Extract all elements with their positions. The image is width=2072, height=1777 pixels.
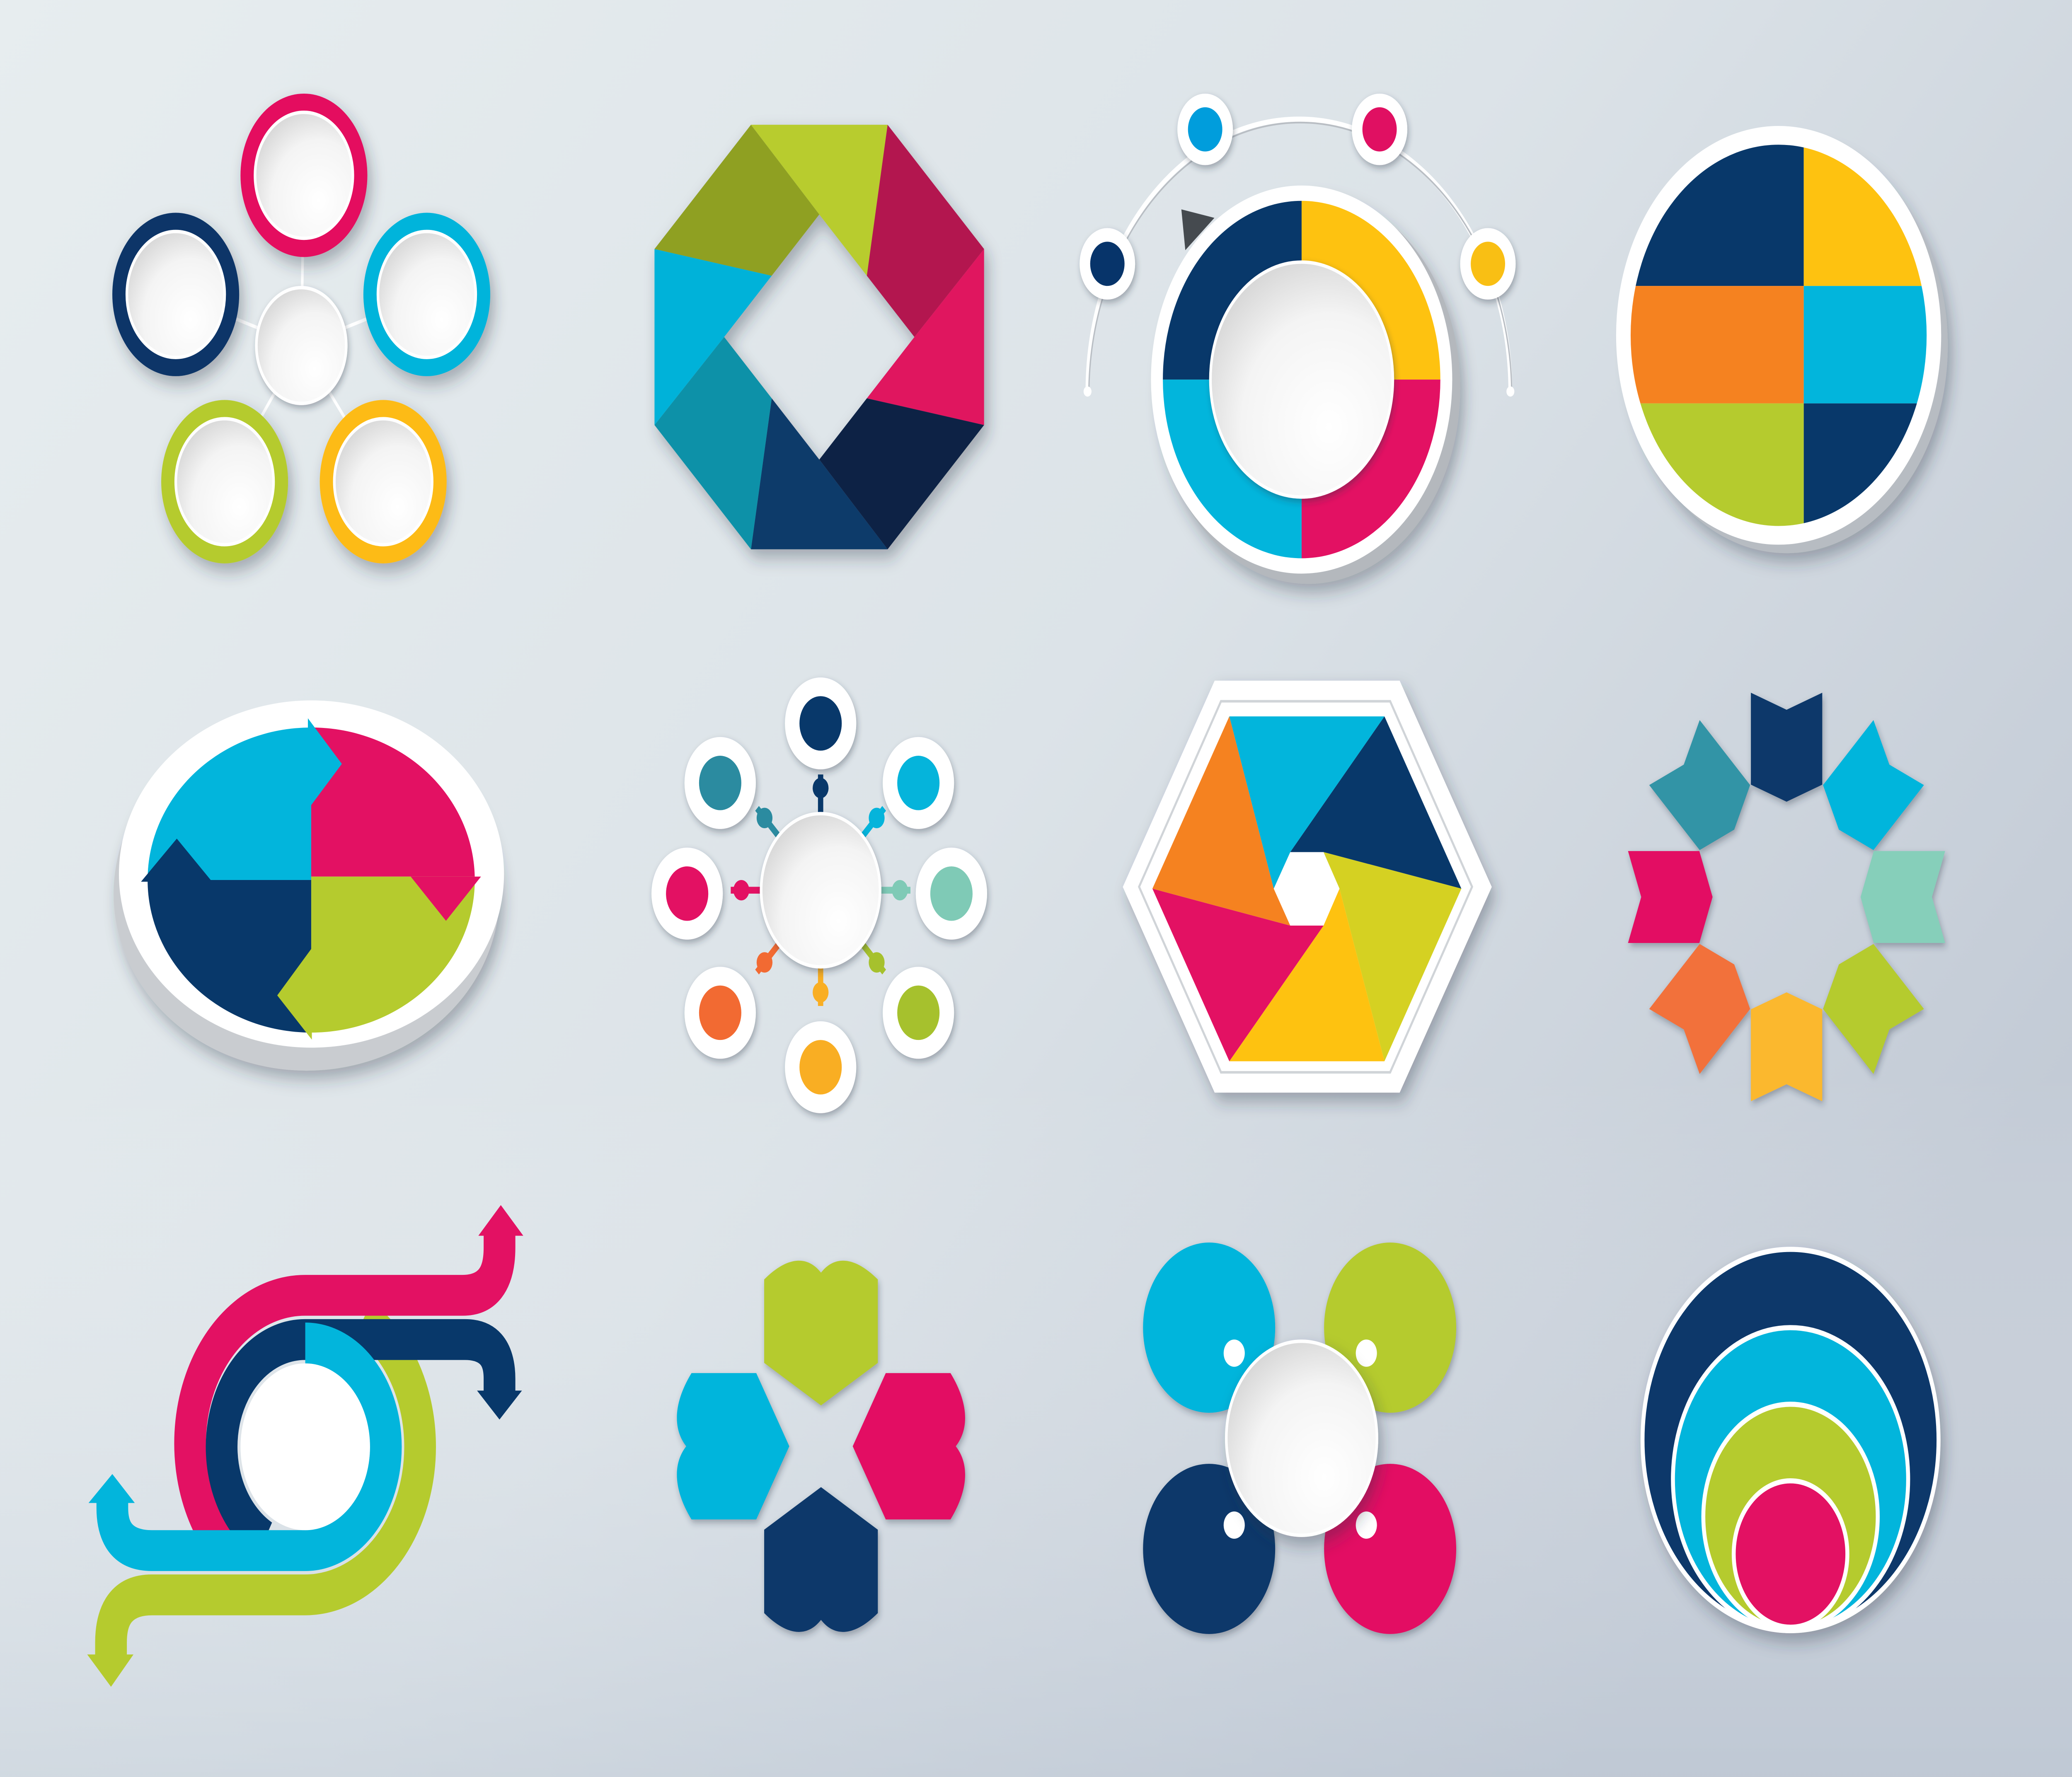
- diagram 6: hub and spoke nodes: [651, 677, 987, 1113]
- diagram 1: five ring circles: [112, 94, 490, 563]
- diagram 5: oval cycle arrows: [114, 701, 504, 1071]
- diagram 7: hexagon pinwheel: [1123, 681, 1492, 1093]
- diagram 8: ring of chevrons: [1628, 693, 1945, 1101]
- diagram 3: donut chart with timeline dots: [1080, 94, 1516, 584]
- diagram 11: four circles with center: [1143, 1243, 1456, 1634]
- diagram 10: four hexagon cross: [677, 1261, 965, 1632]
- diagram 2: folded octagon: [654, 125, 984, 549]
- diagram 4: segmented circle: [1616, 126, 1948, 553]
- diagram 12: concentric circles: [1643, 1249, 1939, 1631]
- diagram 9: swoosh arrows around circle: [87, 1205, 523, 1687]
